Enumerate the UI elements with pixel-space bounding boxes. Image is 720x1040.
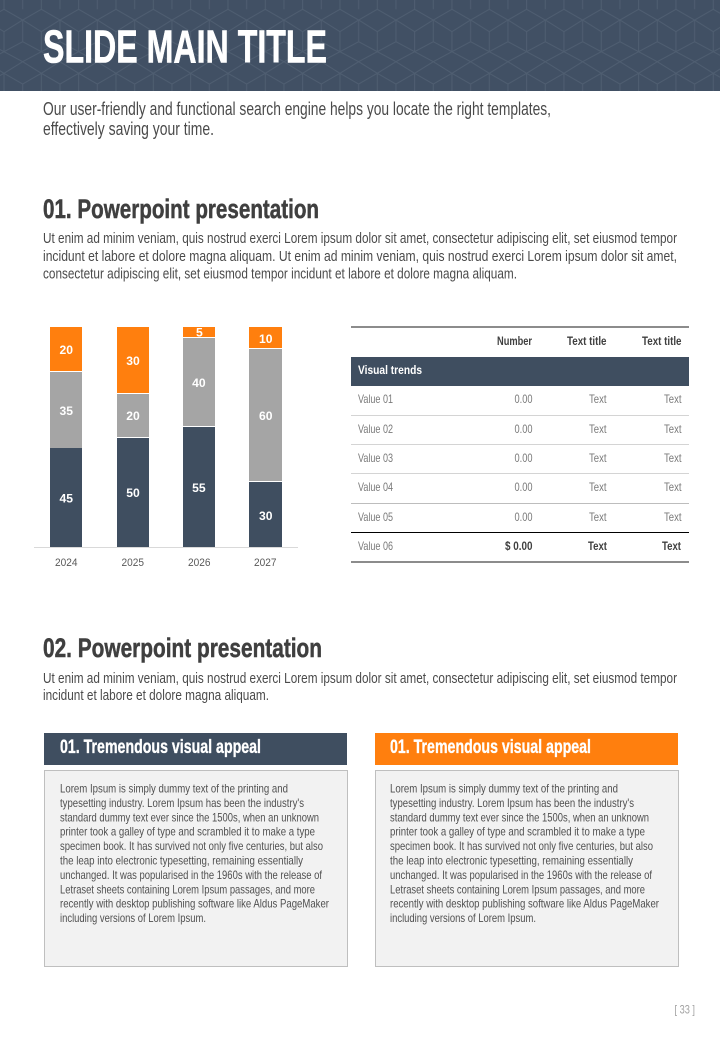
stacked bar chart xyxy=(34,327,298,569)
right card body: standard dummy text ever since the 1500s, when an unknown xyxy=(390,810,649,824)
table row: value 04: 0.00 xyxy=(514,480,533,494)
panel: right card xyxy=(375,733,678,966)
right card body: specimen book. It has survived not only five centuries, but also xyxy=(390,839,653,853)
left card body: Lorem Ipsum is simply dummy text of the printing and xyxy=(60,782,288,796)
data table xyxy=(351,326,689,563)
table band: visual trends xyxy=(351,357,689,386)
page number: [ 33 ] xyxy=(674,1002,695,1016)
table row: value 03: 0.00 xyxy=(514,451,533,465)
table row: value 06 total: Value 06 xyxy=(358,539,393,553)
left card body: printer took a galley of type and scrambled it to make a type xyxy=(60,825,315,839)
table row: value 01 xyxy=(358,392,682,406)
bar 2025: 30 xyxy=(126,356,140,368)
table row: value 01: Text xyxy=(589,392,607,406)
table row: value 05 xyxy=(358,510,682,524)
left card body: recently with desktop publishing software like Aldus PageMaker xyxy=(60,897,329,911)
heading: section 02: 02. Powerpoint presentation xyxy=(43,633,322,663)
paragraph: section 02: incidunt et labore et dolore magna aliquam. xyxy=(43,688,269,704)
table row: value 06 total: $ 0.00 xyxy=(505,539,533,553)
paragraph: section 02 xyxy=(43,671,677,704)
right card body: typesetting industry. Lorem Ipsum has been the industry's xyxy=(390,796,634,810)
bar 2026: 5 xyxy=(196,328,203,340)
table row: value 02: Text xyxy=(664,422,682,436)
table column headers: Text title xyxy=(567,334,607,348)
title: SLIDE MAIN TITLE xyxy=(43,20,327,72)
bar 2027 xyxy=(249,327,282,547)
left card body xyxy=(44,770,348,966)
right card body: printer took a galley of type and scrambled it to make a type xyxy=(390,825,645,839)
table row: value 06 total xyxy=(358,539,681,553)
bar 2026: 55 xyxy=(192,483,206,495)
intro text: effectively saving your time. xyxy=(43,118,214,139)
left card body: typesetting industry. Lorem Ipsum has been the industry's xyxy=(60,796,304,810)
axis year labels: 2026 xyxy=(188,557,210,569)
paragraph: section 01 xyxy=(43,231,677,282)
table row: value 03: Text xyxy=(664,451,682,465)
axis year labels: 2027 xyxy=(254,557,276,569)
right card body: recently with desktop publishing software like Aldus PageMaker xyxy=(390,897,659,911)
bar 2025: 20 xyxy=(126,411,140,423)
table row: value 04: Text xyxy=(589,480,607,494)
table row: value 02 xyxy=(358,422,682,436)
axis year labels xyxy=(55,557,276,569)
axis year labels: 2024 xyxy=(55,557,78,569)
paragraph: section 01: consectetur adipiscing elit, set eiusmod tempor incidunt et labore et dolore magna aliquam. xyxy=(43,266,517,282)
table row: value 04: Text xyxy=(664,480,682,494)
right card header: 01. Tremendous visual appeal xyxy=(390,736,591,758)
table row: value 01: Value 01 xyxy=(358,392,393,406)
table row: value 06 total: Text xyxy=(662,539,681,553)
table row: value 01: 0.00 xyxy=(514,392,533,406)
table row: value 02: Text xyxy=(589,422,607,436)
table column headers xyxy=(497,334,682,348)
bar 2026: 40 xyxy=(192,378,206,390)
bar 2027: 60 xyxy=(259,411,272,423)
left card body: standard dummy text ever since the 1500s, when an unknown xyxy=(60,810,319,824)
left card body: the leap into electronic typesetting, remaining essentially xyxy=(60,854,303,868)
table row: value 04 xyxy=(358,480,682,494)
right card body: the leap into electronic typesetting, remaining essentially xyxy=(390,854,633,868)
bar 2025: 50 xyxy=(126,488,140,500)
table row: value 05: Text xyxy=(589,510,607,524)
right card body: including versions of Lorem Ipsum. xyxy=(390,911,536,925)
bar 2027: 10 xyxy=(259,334,272,346)
table row: value 03 xyxy=(358,451,682,465)
intro text xyxy=(43,98,551,139)
left card body: including versions of Lorem Ipsum. xyxy=(60,911,206,925)
bar 2024: 45 xyxy=(60,494,74,506)
left card body: Letraset sheets containing Lorem Ipsum passages, and more xyxy=(60,882,315,896)
bar 2027: 30 xyxy=(259,511,272,523)
left card header: 01. Tremendous visual appeal xyxy=(60,736,261,758)
chart axis xyxy=(34,546,298,548)
table row: value 05: Value 05 xyxy=(358,510,393,524)
table band: visual trends: Visual trends xyxy=(358,363,422,377)
bar 2024: 20 xyxy=(60,345,73,357)
right card body: Letraset sheets containing Lorem Ipsum passages, and more xyxy=(390,882,645,896)
left card header xyxy=(44,733,347,765)
table row: value 02: Value 02 xyxy=(358,422,393,436)
header banner xyxy=(0,0,720,91)
table row: value 02: 0.00 xyxy=(514,422,533,436)
table row: value 04: Value 04 xyxy=(358,480,393,494)
heading: section 01: 01. Powerpoint presentation xyxy=(43,194,319,224)
table row: value 03: Text xyxy=(589,451,607,465)
axis year labels: 2025 xyxy=(122,557,144,569)
left card body: unchanged. It was popularised in the 1960s with the release of xyxy=(60,868,323,882)
right card body: Lorem Ipsum is simply dummy text of the printing and xyxy=(390,782,618,796)
right card header xyxy=(375,733,678,765)
left card body: specimen book. It has survived not only five centuries, but also xyxy=(60,839,323,853)
panel: left card xyxy=(44,733,348,966)
intro text: Our user-friendly and functional search engine helps you locate the right templates, xyxy=(43,98,551,119)
table row: value 01: Text xyxy=(664,392,682,406)
table column headers: Number xyxy=(497,334,532,348)
bar 2024 xyxy=(50,327,82,547)
bar 2026 xyxy=(183,327,215,547)
table row: value 03: Value 03 xyxy=(358,451,393,465)
table row: value 06 total: Text xyxy=(588,539,607,553)
table row: value 05: Text xyxy=(664,510,682,524)
bar 2024: 35 xyxy=(60,406,74,418)
table column headers: Text title xyxy=(642,334,682,348)
right card body xyxy=(376,770,678,966)
right card body: unchanged. It was popularised in the 1960s with the release of xyxy=(390,868,653,882)
bar 2025 xyxy=(117,327,149,547)
table row: value 05: 0.00 xyxy=(514,510,533,524)
